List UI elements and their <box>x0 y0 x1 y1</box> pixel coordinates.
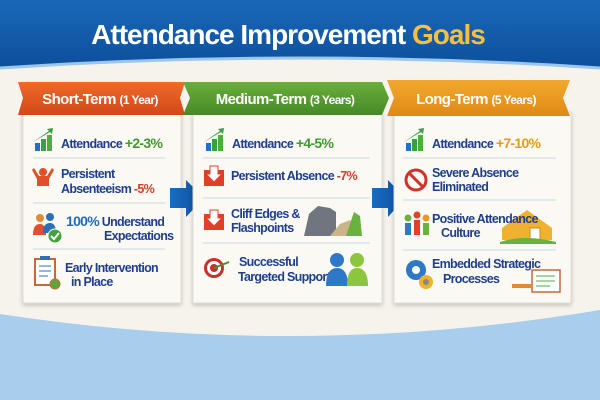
icon: community <box>404 212 430 235</box>
text: embedded strategic processes: Processes <box>443 272 500 286</box>
arrow 1 <box>170 180 204 217</box>
text: cliff edges: Flashpoints <box>231 221 294 235</box>
text: persistent absenteeism: Absenteeism -5% <box>61 182 154 196</box>
icon: people check <box>33 213 62 243</box>
arrow 2 <box>372 180 405 217</box>
panel: long-term <box>387 80 571 303</box>
icon: checklist board <box>512 270 560 292</box>
text: embedded strategic processes: Embedded Strategic <box>432 257 540 271</box>
text: severe absence eliminated: Eliminated <box>432 180 488 194</box>
icon: down arrow box <box>204 210 224 230</box>
icon: no sign <box>406 170 426 190</box>
card <box>193 112 382 303</box>
icon: house <box>500 210 556 244</box>
text: persistent absence: Persistent Absence -7% <box>231 169 357 183</box>
text: successful targeted support: Targeted Support <box>238 270 332 284</box>
text: attendance +4-5%: Attendance +4-5% <box>232 135 334 151</box>
icon: clipboard <box>35 256 60 289</box>
text: early intervention: in Place <box>71 275 113 289</box>
icon: two people <box>326 253 368 286</box>
banner: medium-term <box>183 82 389 115</box>
text: successful targeted support: Successful <box>239 255 298 269</box>
banner: long-term <box>387 80 570 116</box>
icon: bar chart up <box>204 128 224 151</box>
banner: long-term: Long-Term (5 Years) <box>416 91 537 108</box>
panel: short-term <box>18 82 185 303</box>
header band <box>0 0 600 68</box>
text: attendance +2-3%: Attendance +2-3% <box>61 135 163 151</box>
background bottom wave <box>0 310 600 400</box>
text: positive attendance culture: Positive Attendance <box>432 212 538 226</box>
banner: short-term: Short-Term (1 Year) <box>42 91 158 108</box>
card <box>23 112 181 303</box>
text: attendance +7-10%: Attendance +7-10% <box>432 135 542 151</box>
title: Attendance Improvement Goals <box>91 19 485 50</box>
text: positive attendance culture: Culture <box>441 226 481 240</box>
icon: cliffs <box>304 206 362 236</box>
icon: bar chart up <box>33 128 53 151</box>
banner: short-term <box>18 82 185 115</box>
icon: person <box>32 168 54 186</box>
icon: gears <box>406 260 433 289</box>
icon: down arrow box <box>204 166 224 186</box>
text: 100% understand expectations: 100% Understand <box>66 213 164 229</box>
banner: medium-term: Medium-Term (3 Years) <box>216 91 355 108</box>
card <box>394 112 571 303</box>
icon: bar chart up <box>404 128 424 151</box>
panel: medium-term <box>183 82 389 303</box>
text: 100% understand expectations: Expectations <box>104 229 174 243</box>
text: persistent absenteeism: Persistent <box>61 167 114 181</box>
text: early intervention: Early Intervention <box>65 261 158 275</box>
icon: target <box>204 258 229 278</box>
text: cliff edges: Cliff Edges & <box>231 207 300 221</box>
text: severe absence eliminated: Severe Absence <box>432 166 518 180</box>
